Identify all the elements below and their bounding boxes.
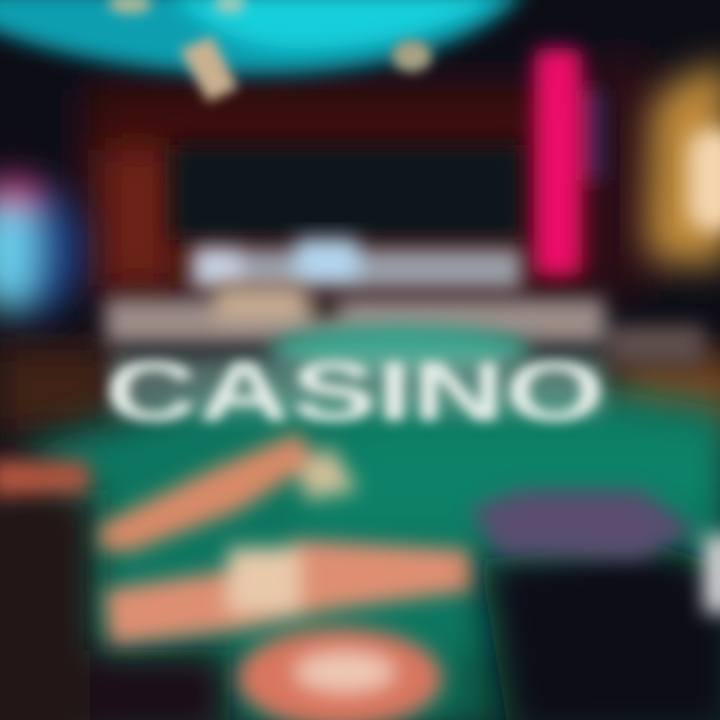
purple chip tops <box>470 490 720 613</box>
beige middle row <box>105 285 705 365</box>
teal ceiling arc <box>0 0 525 74</box>
dark chip stack <box>480 540 720 720</box>
dark bottom left <box>0 490 230 720</box>
golden right screen <box>645 62 720 265</box>
grey haze behind title <box>110 355 605 415</box>
cream screen centre <box>688 128 720 232</box>
teal glow behind title <box>270 324 530 376</box>
white tiles row <box>190 238 522 290</box>
ceiling lights <box>108 0 432 102</box>
salmon poker chips <box>0 432 478 720</box>
green table <box>20 380 720 720</box>
left blue orb <box>0 178 83 316</box>
blurred table title: CASINO <box>105 344 605 438</box>
pink neon bar <box>534 48 604 276</box>
dark back panel <box>172 145 522 240</box>
